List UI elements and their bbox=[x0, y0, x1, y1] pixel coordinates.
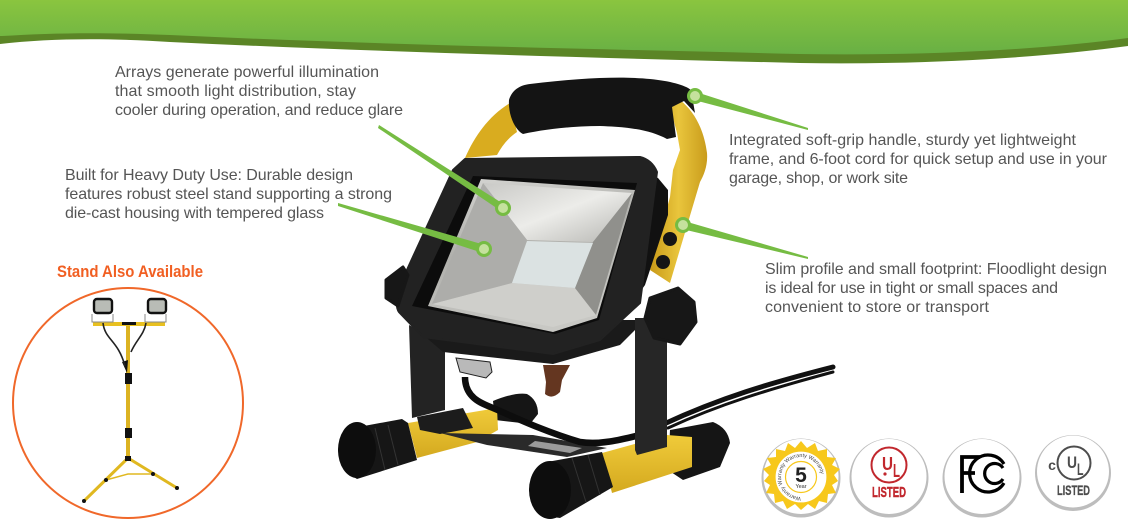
badge: 5 year warranty: Year bbox=[795, 484, 807, 490]
lens frame shadow bbox=[412, 176, 637, 334]
floodlight product photo bbox=[338, 78, 833, 519]
badge: cUL listed: LISTED bbox=[1057, 482, 1090, 498]
text: slim profile callout: convenient to store or transport bbox=[765, 299, 990, 316]
text: heavy duty callout: die-cast housing with tempered glass bbox=[65, 205, 324, 222]
text: handle callout bbox=[729, 132, 1108, 187]
badge: UL listed bbox=[850, 438, 928, 518]
rear foot bbox=[338, 394, 538, 479]
housing rear shell bbox=[600, 170, 668, 340]
right knob bbox=[645, 288, 696, 344]
header wave banner bbox=[0, 0, 1128, 63]
text: arrays callout: Arrays generate powerful illumination bbox=[115, 64, 379, 81]
badge: cUL listed: U bbox=[1067, 453, 1077, 472]
text: heavy duty callout bbox=[65, 167, 392, 222]
badge: cUL listed: L bbox=[1077, 460, 1084, 479]
switches bbox=[656, 232, 677, 269]
text: heavy duty callout: features robust steel stand supporting a strong bbox=[65, 186, 392, 203]
left bracket bbox=[409, 325, 445, 418]
badge: 5 year warranty bbox=[762, 438, 840, 518]
text: slim profile callout: Slim profile and small footprint: Floodlight design bbox=[765, 261, 1107, 278]
heading: stand also available: Stand Also Available bbox=[57, 262, 203, 281]
front foot bbox=[529, 422, 730, 519]
left lamp bbox=[92, 299, 113, 322]
tripod pole bbox=[126, 326, 130, 458]
badge: UL listed: U bbox=[882, 454, 893, 474]
text: slim profile callout bbox=[765, 261, 1107, 316]
badge: cUL listed bbox=[1035, 435, 1111, 511]
tripod legs bbox=[84, 458, 177, 501]
handle yellow left bbox=[465, 103, 517, 158]
left knob bbox=[386, 267, 408, 306]
housing back bbox=[406, 320, 645, 364]
text: handle callout: garage, shop, or work site bbox=[729, 170, 908, 187]
collars bbox=[82, 322, 179, 503]
text: slim profile callout: is ideal for use in tight or small spaces and bbox=[765, 280, 1058, 297]
cables bbox=[103, 323, 146, 366]
internal cable bbox=[465, 377, 640, 443]
handle yellow right bbox=[650, 100, 707, 283]
text: arrays callout: that smooth light distribution, stay bbox=[115, 83, 356, 100]
leader line: handle bbox=[687, 88, 808, 130]
cable gland bbox=[456, 358, 492, 378]
badge: 5 year warranty: 5 bbox=[795, 464, 807, 487]
badge: FCC bbox=[942, 438, 1022, 518]
right bracket bbox=[635, 318, 667, 455]
LED array bbox=[512, 241, 593, 288]
cross plate bbox=[440, 433, 607, 457]
text: handle callout: frame, and 6-foot cord for quick setup and use in your bbox=[729, 151, 1108, 168]
panel: stand inset bbox=[13, 288, 243, 518]
power cord bbox=[664, 367, 833, 428]
strain relief bbox=[543, 365, 570, 397]
text: handle callout: Integrated soft-grip handle, sturdy yet lightweight bbox=[729, 132, 1077, 149]
text: heavy duty callout: Built for Heavy Duty Use: Durable design bbox=[65, 167, 353, 184]
foam grip bbox=[509, 78, 695, 139]
badge: cUL listed: c bbox=[1048, 457, 1056, 473]
badge: 5 year warranty: Warranty Warranty Warranty Warranty bbox=[778, 454, 824, 501]
badge: UL listed: L bbox=[893, 461, 900, 481]
leader line: heavy duty bbox=[338, 203, 492, 257]
housing bbox=[397, 157, 657, 354]
right lamp bbox=[145, 299, 166, 322]
lens bbox=[428, 179, 635, 332]
leader line: arrays bbox=[378, 125, 511, 216]
text: arrays callout bbox=[115, 64, 403, 119]
badge: UL listed: LISTED bbox=[872, 484, 906, 501]
text: arrays callout: cooler during operation, and reduce glare bbox=[115, 102, 403, 119]
leader line: slim profile bbox=[675, 217, 808, 259]
crossbar bbox=[93, 322, 165, 326]
